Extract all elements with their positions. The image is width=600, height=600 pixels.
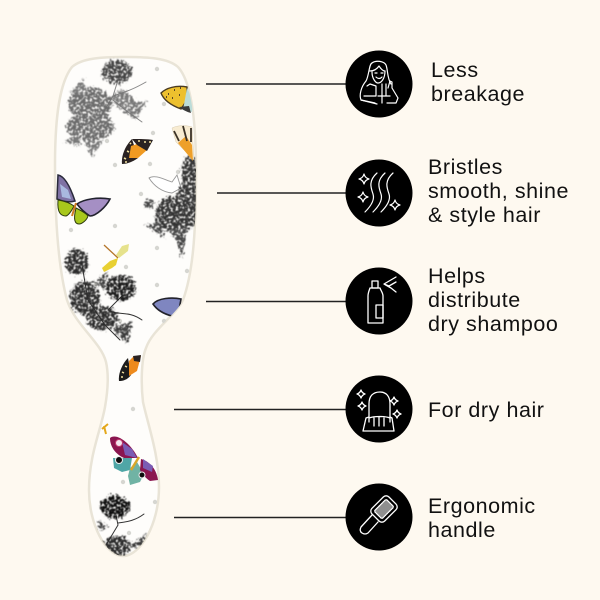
icon: dry hair [346,376,412,442]
label: for dry hair: For dry hair [428,398,545,422]
dragonfly [102,244,129,272]
label: less breakage: breakage [431,82,525,106]
butterfly: orange [122,139,153,164]
label: bristles: & style hair [428,203,541,227]
floral: top left [64,60,148,157]
floral: lower left [65,249,142,344]
label: dry shampoo [428,264,558,336]
butterfly: lower purple [153,298,181,316]
label: bristles [428,155,569,227]
label: dry shampoo: distribute [428,288,521,312]
label: dry shampoo: dry shampoo [428,312,558,336]
label: ergonomic handle [428,494,536,542]
icon: spray bottle [346,268,412,334]
floral: handle [98,495,146,556]
label: less breakage [431,58,525,106]
label: less breakage: Less [431,58,479,82]
label: bristles: smooth, shine [428,179,569,203]
butterfly: handle orange [119,355,141,381]
floral: right [144,156,200,258]
bee [102,424,108,434]
butterfly: peacock [110,436,158,485]
label: dry shampoo: Helps [428,264,486,288]
brush [55,57,200,556]
polka dots [69,67,189,535]
label: ergonomic handle: Ergonomic [428,494,536,518]
icon: paddle brush [346,484,412,550]
label: bristles: Bristles [428,155,503,179]
butterfly: top right [161,86,193,113]
label: ergonomic handle: handle [428,518,496,542]
butterfly: right cream [172,126,194,161]
leader lines [174,84,346,518]
butterfly: purple green [57,175,110,224]
icon: woman brushing hair [346,50,412,118]
icon: wavy hair with sparkles [346,160,412,226]
